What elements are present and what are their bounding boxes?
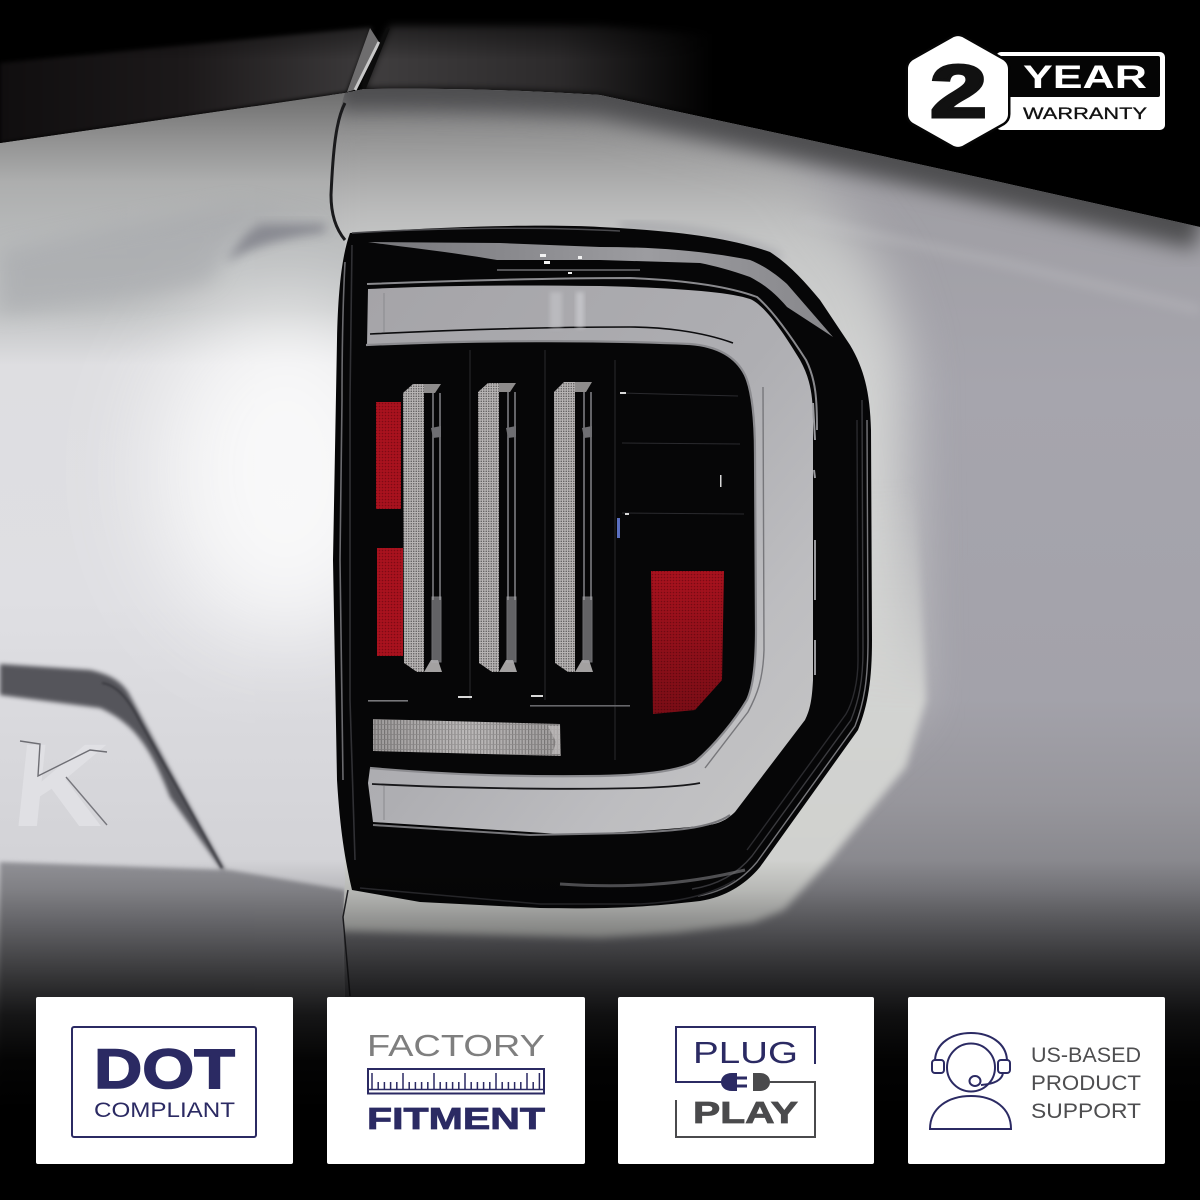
D-shaped light guide tube bbox=[367, 285, 813, 834]
icon: plug bbox=[721, 1073, 747, 1091]
LED bar 1 bbox=[403, 384, 442, 672]
card: product support bbox=[908, 997, 1165, 1164]
icon: headset person bbox=[930, 1033, 1011, 1129]
ruler icon bbox=[368, 1069, 544, 1094]
support text: PRODUCT bbox=[1031, 1072, 1141, 1095]
PLAY label: PLAY bbox=[693, 1095, 798, 1130]
warranty label box bbox=[996, 52, 1165, 130]
FACTORY label: FACTORY bbox=[367, 1028, 545, 1063]
left red reflector upper bbox=[376, 402, 401, 509]
body crease shadow bbox=[2, 218, 241, 310]
card: DOT compliant bbox=[36, 997, 293, 1164]
bright light patch bbox=[155, 300, 415, 640]
tail light assembly bbox=[333, 226, 872, 908]
gray frame bbox=[676, 1082, 815, 1137]
left body panel bbox=[0, 93, 345, 1053]
truck bed rail dark roof panels bbox=[0, 0, 820, 143]
tube detail lines and rims bbox=[366, 278, 817, 835]
LED bar 2 bbox=[478, 383, 517, 672]
right body panel bbox=[330, 80, 1200, 1110]
DOT heading: DOT bbox=[94, 1037, 235, 1100]
icon: socket bbox=[753, 1073, 770, 1091]
lower panel shadow bbox=[0, 860, 345, 1022]
support text: SUPPORT bbox=[1031, 1100, 1141, 1123]
DOT frame bbox=[72, 1027, 256, 1137]
card: plug and play bbox=[618, 997, 874, 1164]
dark inner panel details bbox=[470, 350, 744, 760]
interior glints bbox=[368, 392, 722, 707]
lower raised light halo bbox=[343, 550, 929, 942]
lamp black housing bbox=[333, 226, 872, 908]
lower clear reverse lens bbox=[373, 719, 561, 756]
dark shading along the top edge bbox=[335, 86, 1200, 225]
YEAR: YEAR bbox=[1023, 59, 1147, 95]
support text bbox=[1031, 1044, 1141, 1123]
body panel seam lines bbox=[331, 103, 350, 996]
hexagon bbox=[908, 36, 1008, 147]
support text: US-BASED bbox=[1031, 1044, 1141, 1067]
upper light halo around the lamp bbox=[285, 90, 933, 684]
PLUG label: PLUG bbox=[693, 1035, 798, 1070]
FITMENT label: FITMENT bbox=[367, 1101, 545, 1136]
LED bar 3 bbox=[554, 382, 593, 672]
card: factory fitment bbox=[327, 997, 585, 1164]
embossed letter K: K bbox=[7, 720, 113, 852]
small highlights bbox=[540, 254, 582, 274]
housing edge reflections bbox=[340, 228, 868, 904]
soft shadow above the lamp bbox=[620, 226, 780, 258]
number 2: 2 bbox=[930, 50, 987, 133]
WARRANTY: WARRANTY bbox=[1023, 104, 1147, 123]
right red reflector bbox=[651, 571, 724, 714]
gray upper reflection band bbox=[368, 242, 833, 337]
warranty badge bbox=[908, 36, 1165, 147]
left red reflector lower bbox=[377, 548, 403, 656]
bottom dark fade overlay bbox=[0, 860, 1200, 1200]
badge recess trim bbox=[0, 664, 225, 870]
compliant label: COMPLIANT bbox=[94, 1099, 235, 1122]
navy frame bbox=[676, 1027, 815, 1082]
embossed letter K bbox=[18, 740, 108, 826]
